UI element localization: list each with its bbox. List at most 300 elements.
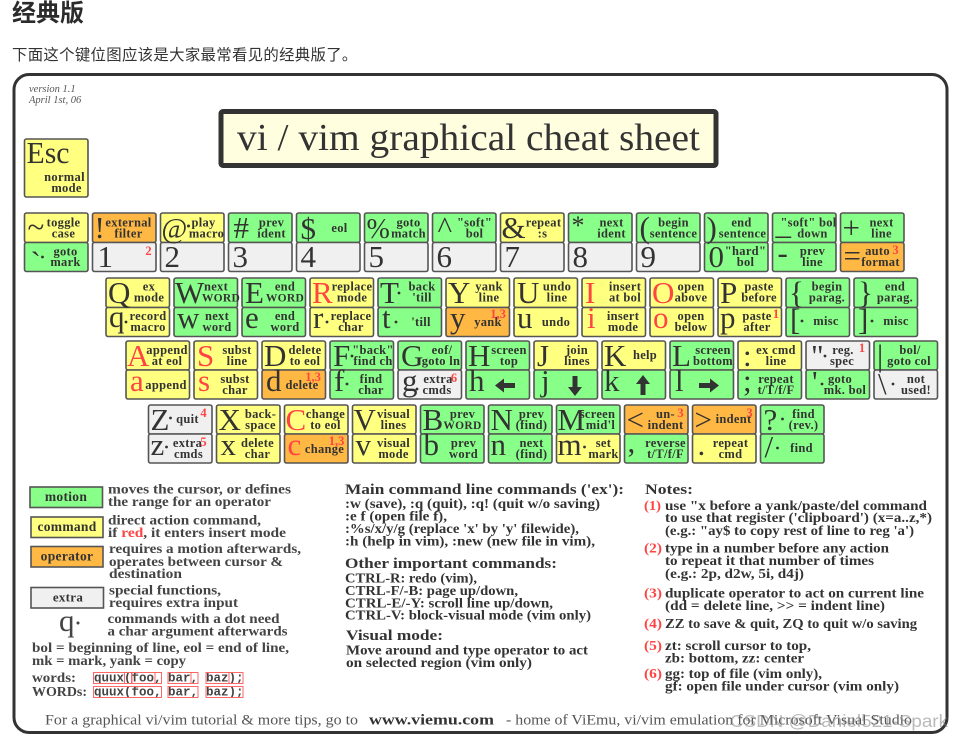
key: Y / y: line: [479, 290, 499, 304]
key: C / c: 1,3: [329, 434, 344, 448]
key: T / t: [378, 275, 442, 336]
key: B / b: b: [424, 427, 439, 462]
legend: command: direct action command,: [108, 512, 261, 528]
key: U / u: line: [547, 290, 567, 304]
key: R / r: [310, 275, 374, 336]
key: C / c: to eol: [310, 418, 341, 432]
key: I / i: i: [587, 300, 596, 335]
footer: - home of ViEmu, vi/vim emulation for Microsoft Visual Studio: [506, 712, 912, 728]
key: U / u: undo: [542, 315, 570, 329]
note 6: gg: top of file (vim only),: [665, 666, 822, 681]
key: Z / z: quit: [176, 412, 199, 426]
key: I / i: [582, 275, 646, 336]
key: ? / slash: ?: [764, 402, 777, 437]
legend: extra: requires extra input: [109, 595, 239, 610]
key: * / 8: ident: [597, 226, 626, 240]
key: E / e: e: [245, 300, 259, 335]
note 6: gf: open file under cursor (vim only): [665, 678, 899, 694]
key: _ / -: line: [802, 255, 823, 269]
key: J / j: join: [565, 343, 588, 357]
key: pipe / backslash: |: [877, 338, 883, 373]
legend: motion: motion: [45, 489, 87, 504]
key: { / [: [786, 275, 850, 337]
legend: motion: [30, 482, 291, 509]
key: E / e: WORD: [266, 292, 304, 304]
note 1: to use that register ('clipboard') (x=a..z,*): [665, 510, 932, 525]
key: J / j: J: [537, 338, 549, 373]
key: double quote / quote: goto: [828, 372, 852, 386]
key: + / =: 3: [892, 243, 899, 257]
notes heading: Notes:: [645, 482, 693, 498]
note 4: (4): [644, 616, 662, 631]
key: G / g: 6: [451, 371, 457, 385]
key: ) / 0: ): [706, 210, 717, 245]
heading: 经典版: 经典版: [12, 0, 84, 27]
key: less than / comma: ,: [628, 424, 635, 459]
key: _ / -: _: [774, 206, 792, 241]
legend: command: command: [37, 519, 97, 534]
key: A / a: at eol: [152, 354, 183, 368]
other important commands: CTRL-V: block-visual mode (vim only): [345, 608, 591, 622]
key: colon / semicolon: line: [766, 354, 786, 368]
key: Y / y: [446, 275, 510, 336]
key: X / x: back-: [245, 407, 276, 421]
key: I / i: insert: [607, 309, 640, 323]
legend: WORDs example: baz);: [206, 686, 244, 700]
legend: extra: special functions,: [109, 582, 221, 598]
key: S / s: [194, 338, 258, 399]
key: T / t: 'till: [411, 315, 431, 329]
legend: operator: [31, 541, 301, 581]
key: F / f: find ch: [353, 354, 393, 368]
key: Esc: Esc: [26, 135, 70, 170]
key: W / w: next: [205, 309, 230, 323]
legend: operator: requires a motion afterwards,: [109, 541, 301, 556]
key: Q / q: [106, 275, 170, 336]
key: X / x: x: [220, 427, 236, 462]
key: B / b: word: [449, 447, 478, 461]
key: P / p: paste: [744, 280, 774, 294]
key: G / g: g: [402, 363, 418, 398]
key: J / j: lines: [564, 354, 590, 368]
key: U / u: U: [517, 275, 539, 310]
intro text: 下面这个键位图应该是大家最常看见的经典版了。: [12, 47, 358, 64]
footer: For a graphical vi/vim tutorial & more tips, go to: [45, 712, 358, 728]
key: Y / y: 1,3: [490, 307, 506, 321]
key: % / 5: 5: [368, 239, 384, 274]
key: } / ]: parag.: [877, 290, 913, 304]
key: Esc: [24, 135, 88, 197]
key: H / h: H: [468, 338, 490, 373]
key: J / j: j: [540, 363, 550, 398]
key: A / a: [126, 338, 190, 399]
key: W / w: WORD: [202, 292, 240, 304]
key: ^ / 6: "soft": [457, 216, 492, 230]
key: D / d: d: [266, 363, 282, 398]
key: # / 3: 3: [232, 239, 248, 274]
key: G / g: goto ln: [422, 354, 460, 368]
key: A / a: A: [127, 338, 150, 373]
key: V / v: visual: [377, 407, 410, 421]
key: T / t: T: [380, 275, 399, 310]
key: ( / 9: sentence: [650, 226, 697, 240]
key: less than / comma: un-: [656, 407, 675, 421]
key: # / 3: prev: [259, 216, 285, 230]
key: % / 5: match: [391, 226, 426, 240]
key: } / ]: [854, 275, 918, 337]
version note: version 1.1: [29, 84, 76, 95]
key: ? / slash: /: [764, 429, 774, 464]
key: R / r: r: [313, 300, 324, 335]
key: W / w: next: [204, 280, 229, 294]
main command line commands: [345, 482, 624, 548]
key: O / o: below: [675, 320, 707, 334]
key: { / [: [: [790, 302, 800, 337]
key row 1: [24, 206, 904, 280]
legend: words example: baz);: [206, 672, 244, 686]
key: less than / comma: 3: [677, 406, 684, 420]
key: ? / slash: find: [792, 407, 815, 421]
key: U / u: undo: [543, 280, 571, 294]
key: _ / -: "soft" bol: [780, 216, 837, 230]
key: Y / y: Y: [448, 275, 470, 310]
key: B / b: prev: [450, 407, 476, 421]
key: L / l: L: [672, 338, 691, 373]
key: ! / 1: 2: [145, 244, 152, 258]
key: A / a: append: [146, 343, 188, 357]
key: P / p: [718, 275, 782, 336]
key: M / m: set: [596, 436, 612, 450]
key: H / h: [466, 338, 530, 399]
key: % / 5: goto: [396, 216, 421, 230]
key: greater than / period: >: [694, 402, 712, 437]
key: } / ]: misc: [883, 314, 909, 328]
key: tilde / backtick: `: [30, 245, 41, 280]
key: N / n: n: [490, 427, 506, 462]
key: less than / comma: [624, 402, 688, 463]
key: pipe / backslash: goto col: [887, 354, 931, 368]
key: Q / q: record: [130, 309, 166, 323]
key: S / s: subst: [222, 343, 252, 357]
notes: [644, 482, 932, 694]
key: * / 8: *: [572, 211, 584, 240]
key: W / w: [174, 275, 240, 336]
key: ( / 9: [636, 210, 700, 274]
key: G / g: extra: [423, 372, 453, 386]
legend: extra: [31, 582, 239, 610]
other important commands: CTRL-F/-B: page up/down,: [345, 583, 518, 598]
key: S / s: char: [222, 383, 248, 397]
key: R / r: mode: [337, 290, 367, 304]
key: Z / z: 5: [200, 435, 207, 449]
key: & / 7: [500, 210, 564, 274]
key: + / =: auto: [865, 244, 890, 258]
key: Esc: mode: [51, 181, 82, 195]
version note: [28, 84, 82, 106]
watermark: CSDN @Daniel521-Spark: [730, 711, 948, 731]
key: Z / z: cmds: [174, 447, 203, 461]
key: ( / 9: 9: [640, 239, 656, 274]
key: ? / slash: [760, 402, 824, 464]
key: _ / -: down: [797, 226, 828, 240]
key: V / v: visual: [377, 436, 410, 450]
key: @ / 2: macro: [189, 226, 224, 240]
key: double quote / quote: 1: [859, 341, 865, 355]
key: Esc: normal: [44, 170, 85, 184]
key: tilde / backtick: goto: [53, 244, 78, 258]
title box: vi / vim graphical cheat sheet: [237, 117, 700, 159]
key: * / 8: [568, 211, 632, 274]
key: pipe / backslash: used!: [901, 383, 931, 397]
key: F / f: "back": [352, 343, 394, 357]
key: ! / 1: 1: [98, 239, 113, 274]
key: F / f: [330, 338, 394, 399]
key: $ / 4: $: [300, 211, 316, 246]
key: # / 3: #: [234, 210, 249, 245]
legend: dot commands: a char argument afterwards: [108, 624, 288, 638]
key: pipe / backslash: bol/: [899, 343, 921, 357]
key: V / v: [352, 402, 416, 463]
key: ^ / 6: 6: [436, 239, 452, 274]
key: X / x: [216, 402, 280, 463]
key: N / n: N: [490, 402, 513, 437]
key: U / u: u: [517, 300, 532, 335]
key: P / p: 1: [773, 307, 779, 321]
key: Q / q: macro: [130, 320, 166, 334]
other important commands: [345, 556, 591, 622]
key: S / s: subst: [220, 372, 250, 386]
key: X / x: char: [245, 447, 270, 461]
key: double quote / quote: spec: [830, 354, 854, 368]
legend: dot commands: commands with a dot need: [108, 611, 280, 626]
key: ! / 1: external: [105, 216, 152, 230]
key: tilde / backtick: [24, 209, 88, 280]
key: C / c: change: [306, 407, 345, 421]
legend: WORDs example: WORDs:: [32, 684, 87, 699]
visual mode: [346, 628, 589, 670]
key: R / r: R: [312, 275, 333, 310]
key: A / a: append: [145, 378, 187, 392]
key: Y / y: yank: [474, 315, 502, 329]
key: greater than / period: [692, 402, 756, 463]
key: double quote / quote: ": [811, 338, 824, 373]
key: } / ]: }: [858, 275, 873, 310]
key: colon / semicolon: :: [743, 338, 752, 373]
key: Z / z: Z: [150, 402, 169, 437]
key: D / d: delete: [285, 378, 319, 392]
key: O / o: O: [652, 275, 674, 310]
key: @ / 2: 2: [164, 239, 180, 274]
key: & / 7: :s: [538, 226, 547, 240]
legend: command: [31, 512, 286, 540]
key: M / m: mark: [588, 447, 619, 461]
key: J / j: [534, 338, 598, 399]
key: ) / 0: end: [731, 216, 752, 230]
key: colon / semicolon: ex cmd: [756, 343, 796, 357]
key: L / l: [670, 338, 734, 399]
key: T / t: t: [382, 300, 391, 335]
command lists: [345, 482, 624, 670]
key: D / d: D: [264, 338, 286, 373]
key: X / x: delete: [241, 436, 274, 450]
key: _ / -: -: [778, 235, 788, 270]
key row 2: [106, 275, 918, 337]
key: B / b: [420, 402, 484, 463]
key: ^ / 6: bol: [466, 226, 484, 240]
key: K / k: K: [604, 338, 627, 373]
key: @ / 2: @: [162, 214, 187, 245]
key: B / b: prev: [451, 436, 477, 450]
key: double quote / quote: reg.: [832, 343, 854, 357]
main command line commands: :e f (open file f),: [345, 508, 447, 524]
note 1: [644, 498, 932, 538]
key: E / e: word: [271, 320, 299, 334]
key: K / k: k: [604, 363, 620, 398]
key: # / 3: [228, 210, 292, 274]
key: P / p: before: [741, 290, 777, 304]
legend: [30, 482, 301, 700]
key: S / s: S: [197, 338, 214, 373]
visual mode: Visual mode:: [346, 628, 443, 644]
key: { / [: begin: [812, 280, 842, 294]
key: X / x: space: [245, 418, 276, 432]
key: } / ]: ]: [858, 302, 868, 337]
key: C / c: C: [286, 402, 306, 437]
key: colon / semicolon: t/T/f/F: [758, 383, 794, 397]
key: M / m: screen: [580, 407, 615, 421]
key: double quote / quote: mk. bol: [824, 383, 866, 397]
key: P / p: P: [720, 275, 737, 310]
main command line commands: :w (save), :q (quit), :q! (quit w/o saving): [345, 496, 600, 511]
key: C / c: [284, 402, 348, 463]
key: C / c: c: [288, 427, 301, 462]
key: B / b: WORD: [443, 420, 482, 432]
legend: operator: operates between cursor &: [109, 554, 283, 569]
key: H / h: h: [469, 363, 485, 398]
note 1: use "x before a yank/paste/del command: [665, 498, 928, 513]
key: T / t: 'till: [412, 290, 432, 304]
key: M / m: [556, 402, 620, 463]
legend: extra: extra: [53, 590, 83, 604]
key: Q / q: q: [109, 299, 124, 334]
key: & / 7: repeat: [526, 216, 562, 230]
key: V / v: lines: [381, 418, 406, 432]
key: $ / 4: eol: [331, 221, 348, 235]
legend: motion: the range for an operator: [108, 494, 271, 509]
key: @ / 2: [160, 213, 224, 274]
key: ( / 9: (: [640, 210, 650, 245]
key: % / 5: [364, 213, 428, 274]
key: tilde / backtick: case: [52, 226, 75, 240]
note 3: (3): [644, 586, 662, 600]
key: Y / y: y: [450, 300, 466, 335]
key: # / 3: ident: [257, 226, 286, 240]
legend: words example: quux(foo,: [94, 672, 162, 686]
key: ! / 1: filter: [114, 226, 143, 240]
key: N / n: [488, 402, 552, 463]
key: N / n: (find): [516, 447, 547, 461]
key: tilde / backtick: ~: [28, 209, 44, 244]
note 1: (1): [644, 498, 661, 513]
key: E / e: end: [275, 309, 295, 323]
key: greater than / period: .: [698, 427, 705, 462]
key: W / w: W: [175, 275, 205, 310]
footer: www.viemu.com: [369, 712, 495, 728]
note 5: (5): [644, 638, 662, 653]
key: * / 8: 8: [572, 239, 588, 274]
key row 3: [126, 338, 938, 401]
main command line commands: :%s/x/y/g (replace 'x' by 'y' filewide),: [345, 521, 579, 536]
key: E / e: [242, 275, 306, 336]
key: + / =: format: [861, 255, 900, 269]
key: T / t: back: [409, 280, 435, 294]
key: M / m: m: [558, 427, 582, 462]
key: K / k: help: [633, 348, 657, 362]
key: ! / 1: !: [94, 210, 105, 245]
key: N / n: (find): [516, 418, 547, 432]
key: F / f: find: [360, 372, 382, 386]
key: tilde / backtick: toggle: [47, 216, 81, 230]
key: Y / y: yank: [475, 280, 503, 294]
key: D / d: delete: [288, 343, 322, 357]
key: less than / comma: <: [626, 402, 644, 437]
key: D / d: to eol: [290, 354, 321, 368]
key: I / i: insert: [609, 280, 642, 294]
key: F / f: f: [334, 363, 345, 398]
key: ! / 1: [92, 210, 156, 274]
legend: command: if red, it enters insert mode: [108, 525, 286, 540]
key: V / v: mode: [378, 447, 409, 461]
key: Q / q: mode: [134, 290, 164, 304]
key: + / =: line: [871, 226, 892, 240]
key: L / l: bottom: [693, 354, 733, 368]
legend: abbreviations: [32, 640, 289, 668]
key: V / v: V: [354, 402, 376, 437]
key: O / o: [650, 275, 714, 336]
key: ? / slash: (rev.): [789, 418, 818, 432]
key: colon / semicolon: [738, 338, 802, 399]
key: { / [: misc: [813, 314, 839, 328]
key: + / =: [840, 210, 904, 273]
legend: words example: [32, 670, 244, 686]
key: } / ]: end: [885, 280, 905, 294]
key: @ / 2: play: [191, 216, 216, 230]
key: V / v: v: [356, 427, 372, 462]
key: Z / z: extra: [173, 436, 203, 450]
key: $ / 4: 4: [300, 239, 316, 274]
key: L / l: l: [675, 363, 684, 398]
key: O / o: open: [678, 280, 704, 294]
note 6: (6): [644, 666, 662, 681]
legend: WORDs example: [32, 684, 244, 700]
key: B / b: B: [422, 402, 443, 437]
key: P / p: paste: [742, 309, 772, 323]
key: + / =: =: [844, 238, 861, 273]
main command line commands: Main command line commands ('ex'):: [345, 482, 624, 498]
key: double quote / quote: ': [812, 364, 818, 399]
key: less than / comma: t/T/f/F: [647, 447, 684, 461]
note 3: [644, 586, 924, 613]
key: H / h: screen: [491, 343, 527, 357]
key: I / i: mode: [608, 320, 638, 334]
key: O / o: o: [653, 300, 668, 335]
key: less than / comma: reverse: [645, 436, 686, 450]
visual mode: on selected region (vim only): [346, 655, 532, 670]
note 2: (e.g.: 2p, d2w, 5i, d4j): [665, 566, 804, 581]
key: K / k: [602, 338, 666, 399]
legend: abbreviations: bol = beginning of line, eol = end of line,: [32, 640, 289, 655]
key: F / f: char: [358, 383, 384, 397]
